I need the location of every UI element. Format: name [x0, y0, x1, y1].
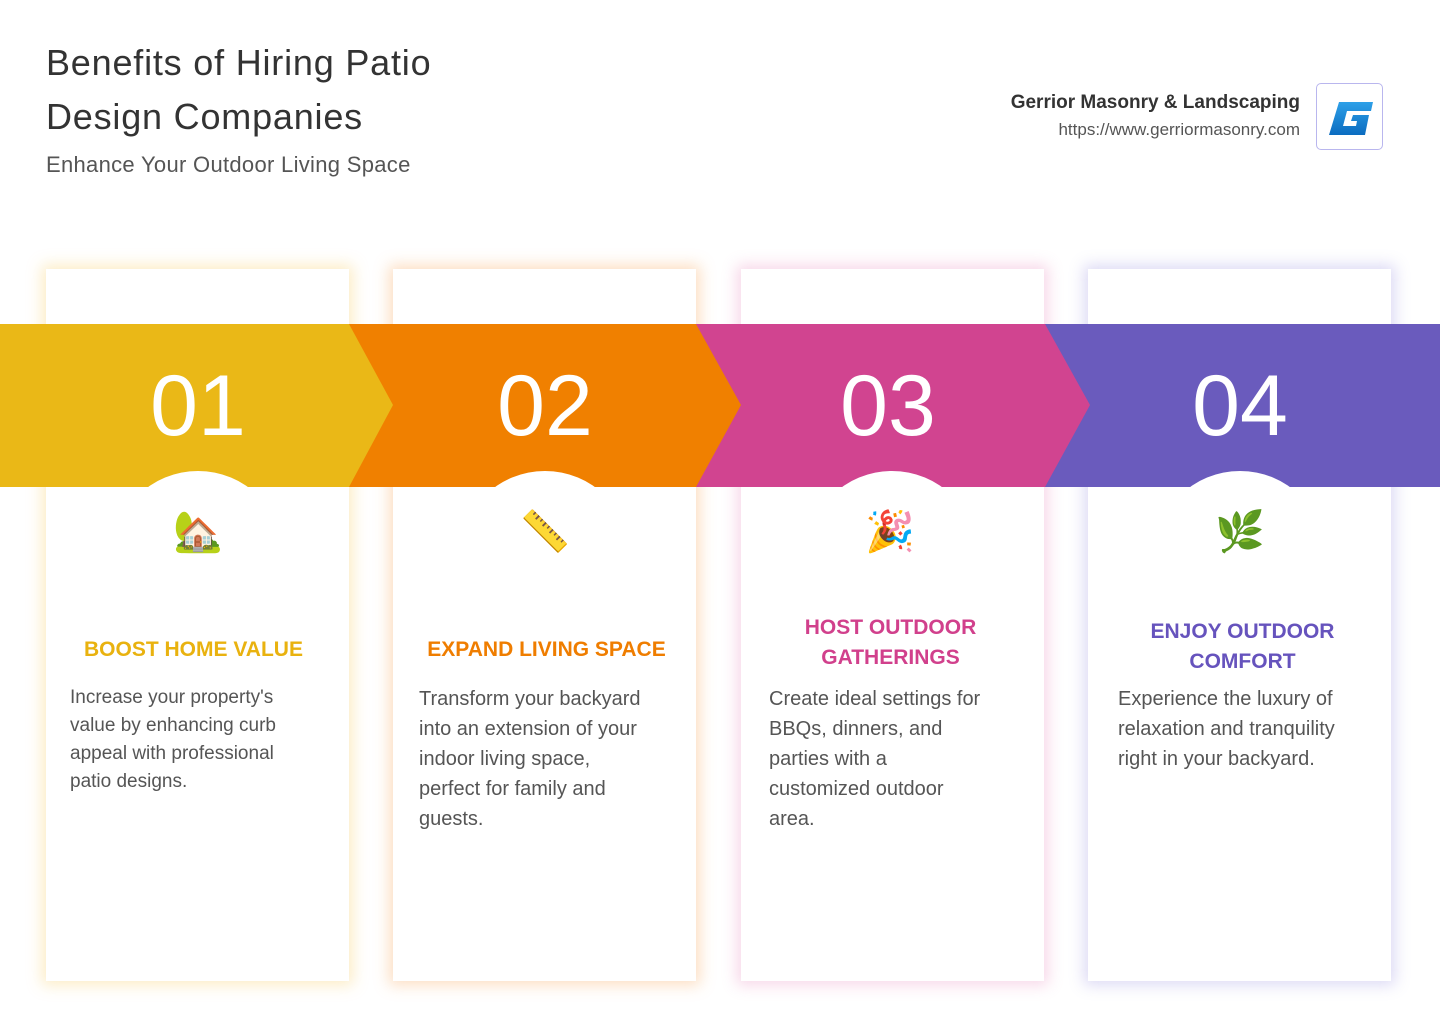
- text 3: area.: [769, 808, 815, 830]
- text 2: Transform your backyard into an extension of your indoor living space,: [419, 688, 641, 770]
- subtitle: Enhance Your Outdoor Living Space: [46, 152, 411, 177]
- text 2: guests.: [419, 808, 483, 830]
- brand text: [1011, 92, 1300, 139]
- text 3: parties with a: [769, 748, 887, 770]
- brand text: https://www.gerriormasonry.com: [1058, 120, 1300, 139]
- heading 3: HOST OUTDOOR: [805, 616, 976, 639]
- card 2: [393, 269, 696, 981]
- text 2: [419, 688, 641, 830]
- text 3: Create ideal settings for BBQs, dinners, and: [769, 688, 980, 740]
- card 1: [46, 269, 349, 981]
- title: [46, 42, 431, 137]
- heading 2: EXPAND LIVING SPACE: [427, 638, 666, 661]
- logo: [1316, 83, 1383, 150]
- heading 4: COMFORT: [1189, 650, 1296, 673]
- brand text: Gerrior Masonry & Landscaping: [1011, 92, 1300, 113]
- card 4: [1088, 269, 1391, 981]
- title: Benefits of Hiring Patio: [46, 42, 431, 83]
- arrow band: 03: [840, 358, 936, 454]
- heading 3: [805, 616, 976, 669]
- text 3: [769, 688, 980, 830]
- heading 3: GATHERINGS: [821, 646, 960, 669]
- arrow band: 04: [1192, 358, 1288, 454]
- icon: herb: 🌿: [1215, 508, 1265, 555]
- text 3: customized outdoor: [769, 778, 944, 800]
- text 1: Increase your property's value by enhancing curb appeal with professional patio designs.: [70, 687, 276, 792]
- icon: party: 🎉: [865, 508, 915, 555]
- icon: ruler: 📏: [520, 508, 570, 555]
- title: Design Companies: [46, 96, 363, 137]
- icon: house: 🏡: [173, 508, 223, 555]
- heading 1: BOOST HOME VALUE: [84, 638, 303, 661]
- text 2: perfect for family and: [419, 778, 606, 800]
- heading 4: [1150, 620, 1334, 673]
- card 3: [741, 269, 1044, 981]
- arrow band: 01: [150, 358, 246, 454]
- heading 4: ENJOY OUTDOOR: [1150, 620, 1334, 643]
- text 4: Experience the luxury of relaxation and tranquility right in your backyard.: [1118, 688, 1335, 770]
- arrow band: 02: [497, 358, 593, 454]
